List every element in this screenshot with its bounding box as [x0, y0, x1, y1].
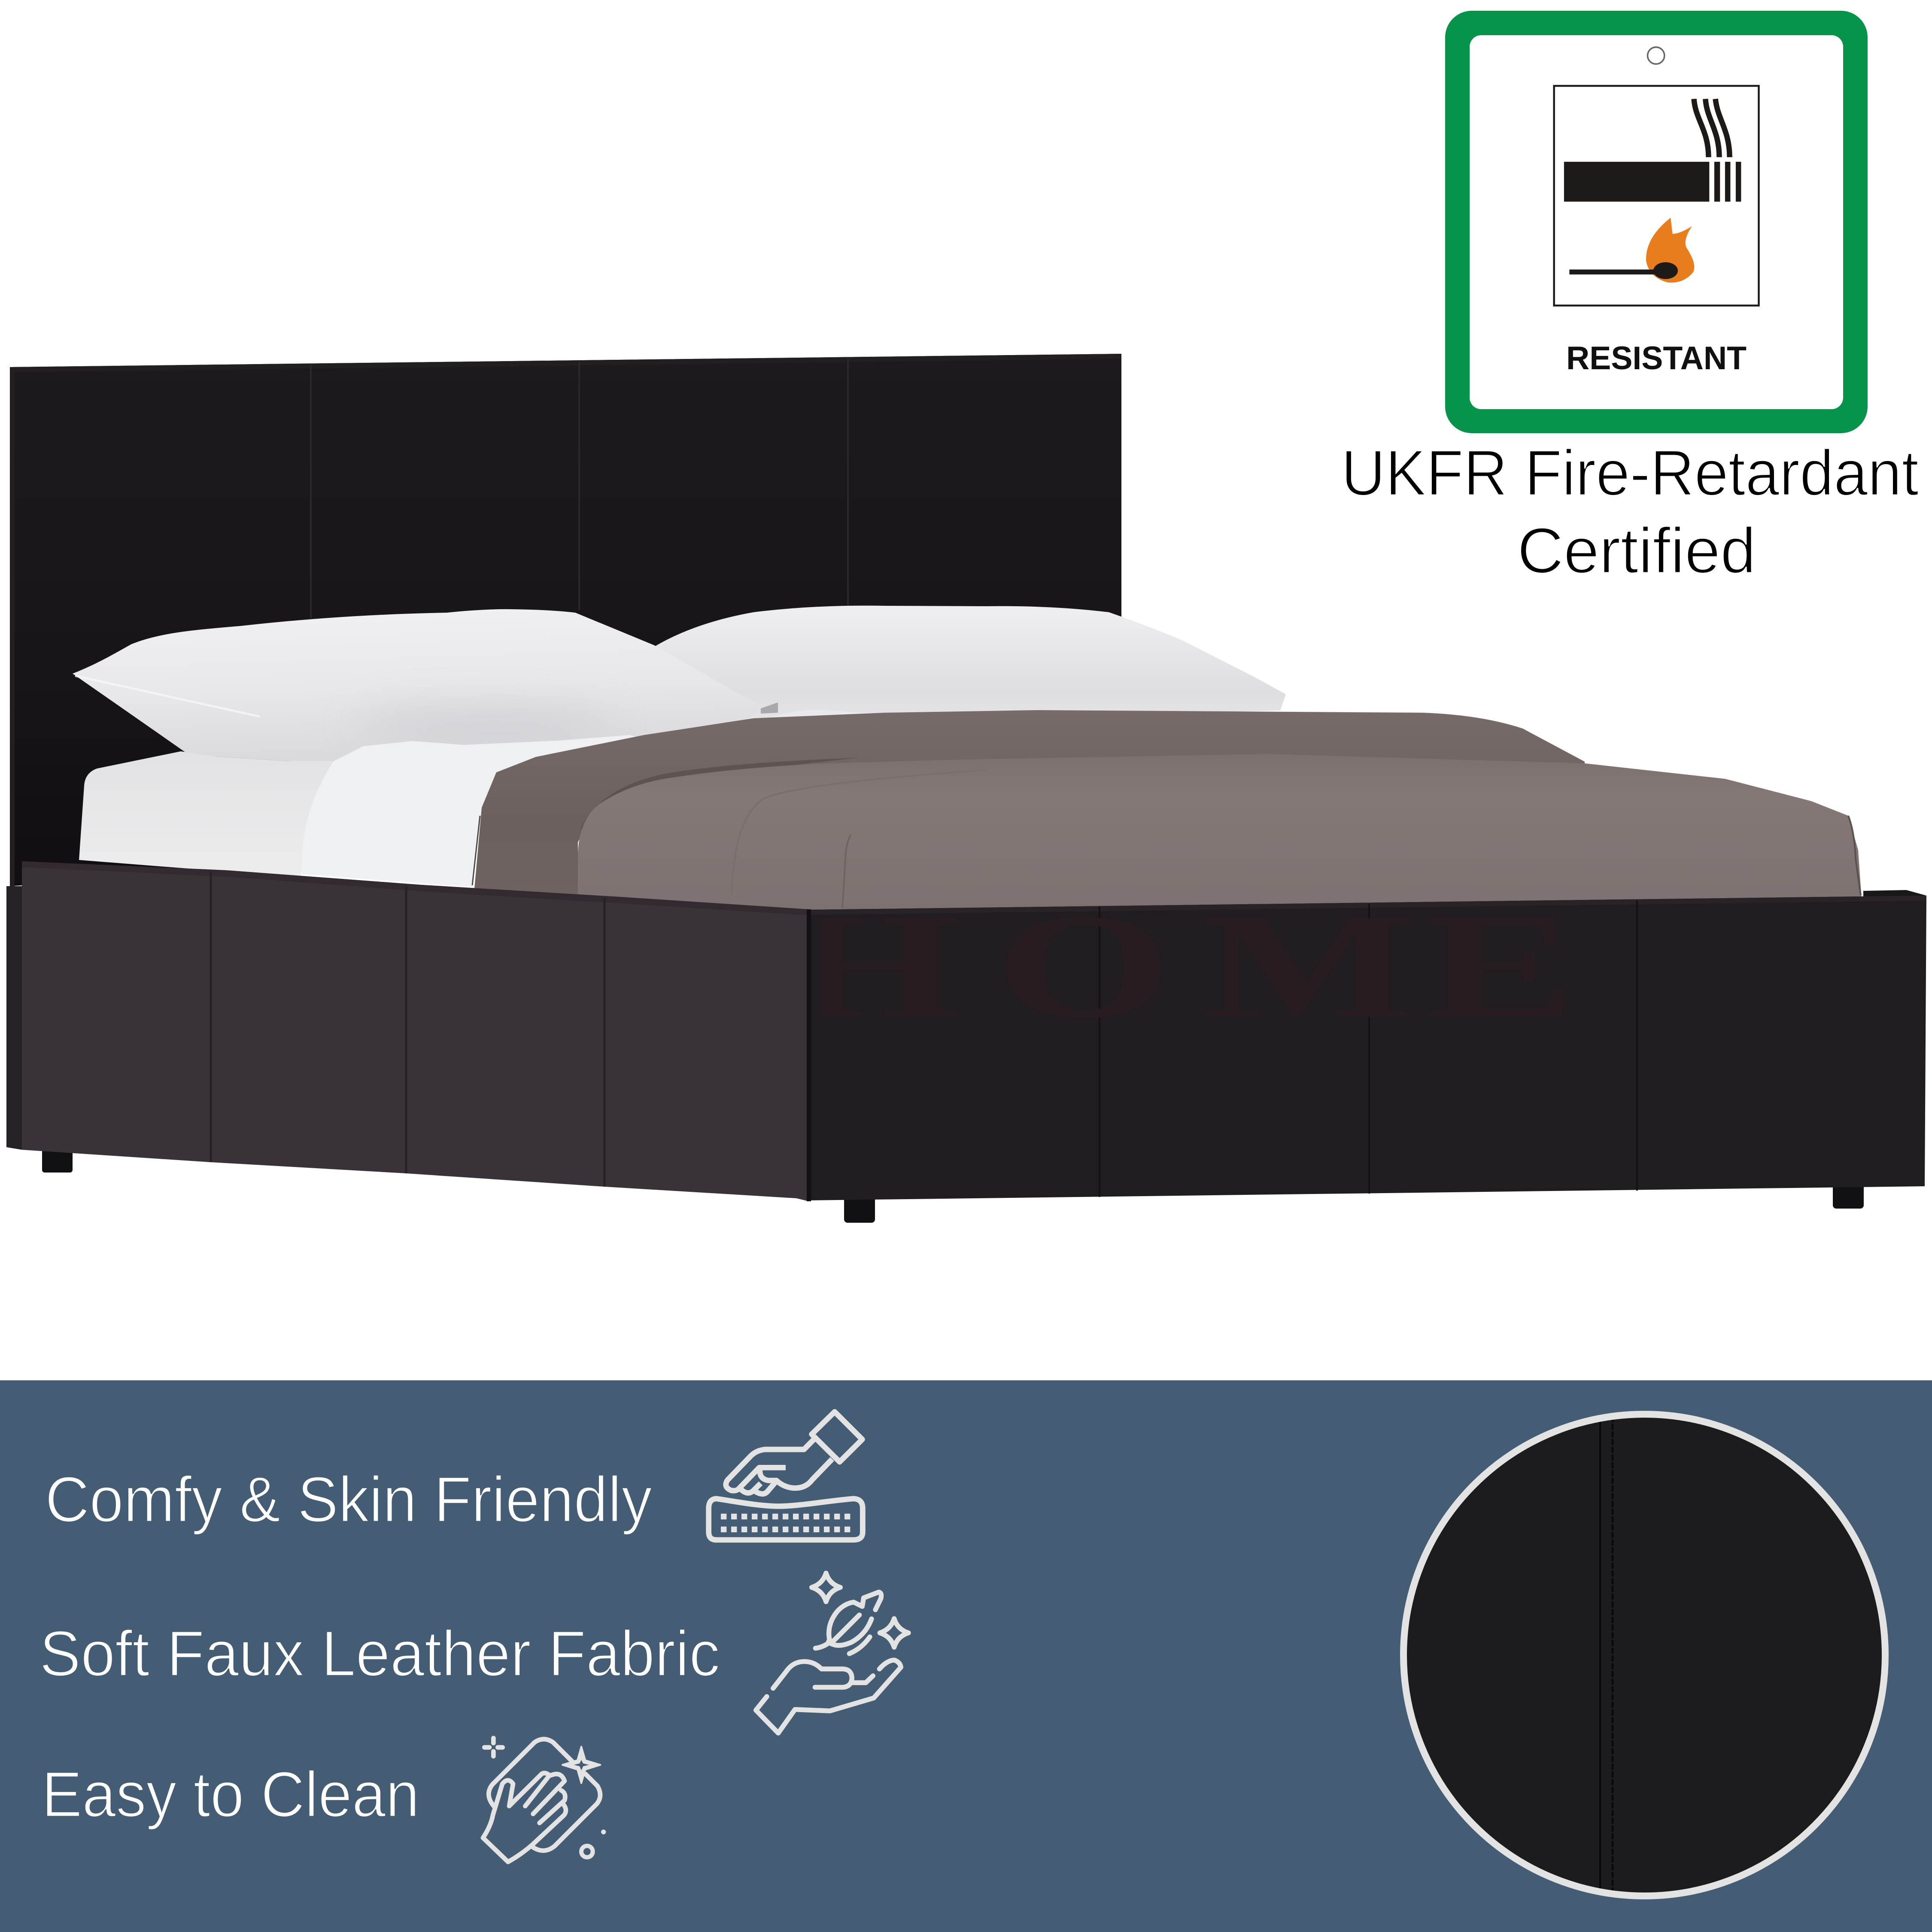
- pillow knot: [761, 702, 778, 714]
- fire label icon: [1554, 47, 1759, 306]
- frame lip behind foot panel: [1863, 890, 1926, 899]
- back right pillow: [655, 606, 1286, 730]
- panel: blue features band: [0, 1380, 1932, 1932]
- shadow under throw roll: [580, 758, 859, 831]
- feature: easy to clean: Easy to Clean: [42, 1758, 419, 1830]
- green badge frame: [1445, 11, 1868, 433]
- right leg: [1833, 1181, 1864, 1209]
- bed foot panel: [786, 883, 1926, 1201]
- RESISTANT label: RESISTANT: [1566, 340, 1747, 377]
- feature: soft faux leather fabric: Soft Faux Leather Fabric: [39, 1617, 720, 1689]
- sheet sliver behind throw: [747, 710, 889, 730]
- badge white face: [1470, 35, 1843, 409]
- white fitted sheet: [79, 735, 644, 891]
- middle leg: [844, 1194, 875, 1223]
- icon: feather over hand: [756, 1573, 908, 1733]
- icon: hand pressing mattress: [709, 1412, 863, 1540]
- icon: hand wiping with cloth: [483, 1738, 606, 1862]
- fabric close-up circle: [1403, 1408, 1885, 1902]
- certification caption line 1: UKFR Fire-Retardant: [1341, 437, 1919, 509]
- headboard: [10, 354, 1121, 886]
- certification caption line 2: Certified: [1517, 514, 1756, 586]
- front left pillow: [73, 609, 765, 761]
- grey throw fold: [474, 710, 1585, 899]
- bed illustration: [6, 354, 1926, 1223]
- bed side rail: [6, 861, 809, 1201]
- feature: comfy and skin friendly: Comfy & Skin Friendly: [45, 1463, 652, 1535]
- grey duvet top: [578, 754, 1862, 912]
- panel: fire-retardant badge: [1445, 11, 1868, 433]
- left leg: [42, 1146, 73, 1173]
- faint HOME watermark: HOME: [786, 883, 1576, 1049]
